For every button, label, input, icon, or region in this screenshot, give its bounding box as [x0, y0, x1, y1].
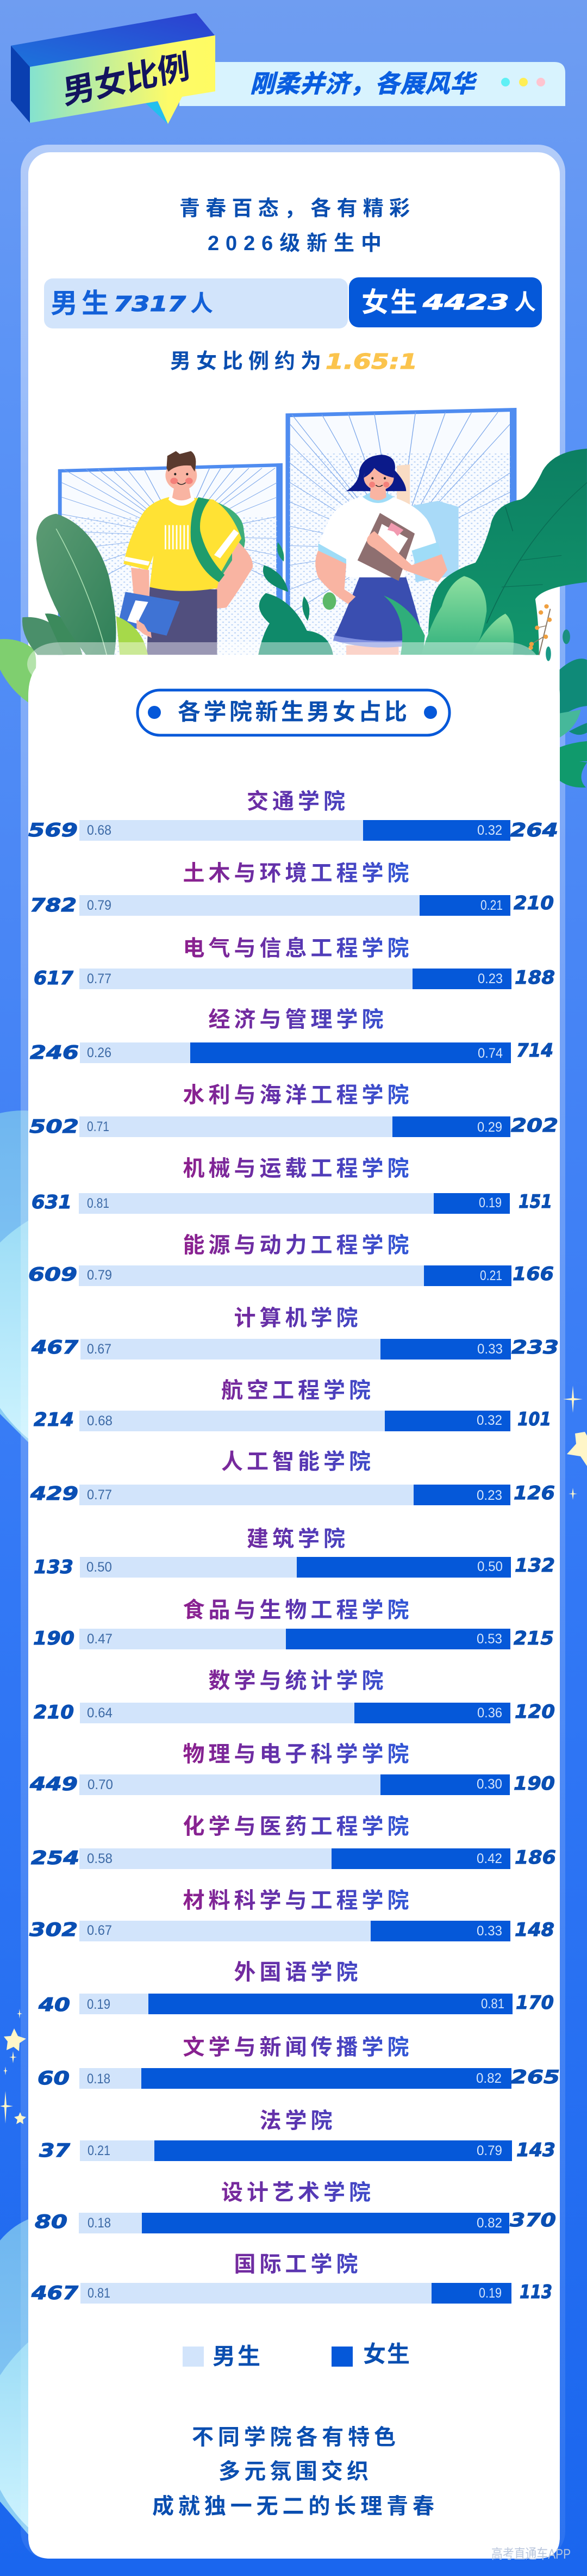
row: 机械与运载工程学院: 机械与运载工程学院 [183, 1157, 413, 1181]
row: 国际工学院: 113 [520, 2281, 552, 2303]
row: 法学院 [39, 2109, 555, 2162]
bar: 文学与新闻传播学院: 0.18 [87, 2071, 110, 2087]
row: 国际工学院 [31, 2252, 552, 2304]
summary block [44, 197, 542, 374]
row: 食品与生物工程学院 [33, 1598, 554, 1649]
row: 交通学院 [28, 790, 558, 841]
bar: 建筑学院 [80, 1557, 511, 1578]
bar: 国际工学院: 0.19 [479, 2286, 502, 2301]
row: 化学与医药工程学院: 254 [31, 1847, 79, 1869]
row: 经济与管理学院: 经济与管理学院 [209, 1008, 387, 1032]
row: 航空工程学院: 101 [517, 1408, 551, 1430]
subtitle bar [179, 62, 565, 106]
chart panel [28, 655, 560, 2559]
row: 航空工程学院: 214 [34, 1409, 74, 1431]
legend [183, 2342, 410, 2369]
row: 建筑学院: 建筑学院 [247, 1527, 349, 1551]
row: 建筑学院 [34, 1527, 555, 1578]
ratio sentence [170, 350, 417, 374]
bar: 航空工程学院 [79, 1411, 510, 1431]
decorative dots [501, 78, 545, 86]
bar: 能源与动力工程学院: 0.79 [87, 1268, 112, 1283]
row: 人工智能学院: 人工智能学院 [221, 1450, 374, 1474]
bar: 能源与动力工程学院 [79, 1265, 511, 1286]
bar: 人工智能学院: 0.77 [87, 1487, 112, 1503]
female total pill: 4423 [422, 290, 509, 314]
bar: 电气与信息工程学院: 0.23 [478, 971, 503, 986]
bar: 外国语学院: 0.81 [481, 1996, 504, 2012]
bar: 电气与信息工程学院: 0.77 [87, 971, 111, 986]
row: 数学与统计学院 [34, 1669, 555, 1723]
row: 电气与信息工程学院: 188 [515, 967, 555, 989]
bar: 机械与运载工程学院: 0.19 [479, 1195, 502, 1211]
male total pill: 男生 [51, 288, 109, 319]
legend: 男生 [213, 2344, 260, 2369]
row: 计算机学院: 467 [31, 1337, 78, 1358]
bar: 物理与电子科学学院: 0.70 [88, 1777, 113, 1792]
row: 人工智能学院 [30, 1450, 555, 1505]
bar: 经济与管理学院: 0.74 [478, 1046, 503, 1061]
bar: 数学与统计学院: 0.64 [87, 1705, 113, 1721]
row: 化学与医药工程学院 [31, 1815, 556, 1869]
bar: 土木与环境工程学院 [79, 895, 510, 916]
bar: 化学与医药工程学院: 0.58 [87, 1851, 113, 1866]
row: 设计艺术学院: 80 [35, 2211, 67, 2233]
row: 外国语学院 [38, 1960, 554, 2016]
bar: 法学院: 0.79 [477, 2143, 502, 2158]
row: 法学院: 37 [39, 2140, 70, 2162]
bar: 国际工学院: 0.81 [88, 2286, 110, 2301]
plants [0, 449, 587, 761]
stars left [0, 2009, 26, 2124]
row: 计算机学院: 计算机学院 [234, 1306, 362, 1330]
row: 建筑学院: 133 [34, 1556, 73, 1578]
bar: 外国语学院: 0.19 [87, 1997, 110, 2012]
bar: 食品与生物工程学院: 0.47 [87, 1631, 113, 1647]
closing text: 成就独一无二的长理青春 [152, 2494, 434, 2518]
row: 物理与电子科学学院: 物理与电子科学学院 [183, 1742, 413, 1766]
bar: 国际工学院 [80, 2283, 511, 2304]
row: 外国语学院: 170 [516, 1992, 554, 2014]
row: 土木与环境工程学院: 土木与环境工程学院 [183, 861, 413, 885]
row: 法学院: 法学院 [260, 2109, 336, 2133]
closing text: 不同学院各有特色 [192, 2425, 396, 2449]
legend: 女生 [363, 2342, 410, 2367]
subtitle: 刚柔并济，各展风华 [250, 70, 477, 98]
ratio sentence: 男女比例约为 [170, 350, 321, 373]
bar: 经济与管理学院 [80, 1042, 511, 1063]
row: 水利与海洋工程学院: 202 [511, 1115, 558, 1137]
bar: 材料科学与工程学院 [79, 1921, 510, 1941]
translucent panel lip [27, 642, 539, 686]
header banner [11, 13, 565, 124]
watermark: 高考直通车APP [491, 2547, 571, 2562]
chart heading pill [138, 690, 449, 735]
row: 文学与新闻传播学院 [38, 2035, 560, 2089]
row: 建筑学院: 132 [515, 1555, 555, 1576]
row: 外国语学院: 外国语学院 [234, 1960, 362, 1984]
row: 国际工学院: 467 [31, 2282, 78, 2304]
intro line 2: 2026级新生中 [208, 232, 382, 255]
row: 经济与管理学院 [30, 1008, 553, 1064]
bar: 文学与新闻传播学院 [79, 2068, 511, 2089]
bar: 能源与动力工程学院: 0.21 [480, 1268, 502, 1283]
chart heading pill: 各学院新生男女占比 [178, 699, 407, 724]
bar: 计算机学院: 0.33 [477, 1342, 503, 1357]
row: 材料科学与工程学院: 材料科学与工程学院 [183, 1889, 413, 1913]
frame behind male student [58, 463, 283, 655]
male total pill [44, 278, 348, 328]
bar: 化学与医药工程学院 [79, 1848, 510, 1869]
row: 材料科学与工程学院: 148 [515, 1919, 554, 1941]
background blob lower left [0, 2218, 33, 2540]
bar: 设计艺术学院: 0.82 [477, 2215, 502, 2231]
female total pill: 女生 [361, 287, 417, 318]
row: 文学与新闻传播学院: 文学与新闻传播学院 [183, 2035, 413, 2059]
row: 食品与生物工程学院: 190 [33, 1628, 74, 1649]
bar: 化学与医药工程学院: 0.42 [477, 1851, 502, 1866]
row: 水利与海洋工程学院: 水利与海洋工程学院 [183, 1083, 413, 1107]
row: 电气与信息工程学院: 617 [34, 967, 73, 989]
row: 经济与管理学院: 246 [30, 1042, 79, 1064]
bar: 土木与环境工程学院: 0.21 [480, 898, 503, 913]
row: 材料科学与工程学院 [29, 1889, 554, 1941]
row: 电气与信息工程学院 [34, 936, 555, 989]
row: 国际工学院: 国际工学院 [234, 2252, 362, 2276]
3D title block [11, 13, 215, 124]
row: 航空工程学院: 航空工程学院 [221, 1379, 374, 1402]
bar: 计算机学院: 0.67 [87, 1342, 111, 1357]
bar: 法学院 [80, 2140, 512, 2161]
row: 物理与电子科学学院: 190 [514, 1773, 555, 1795]
row: 能源与动力工程学院: 609 [28, 1264, 77, 1286]
row: 计算机学院: 233 [511, 1337, 559, 1358]
bar: 物理与电子科学学院: 0.30 [477, 1777, 502, 1792]
female total pill: 人 [514, 290, 536, 314]
bar: 建筑学院: 0.50 [477, 1559, 503, 1574]
row: 设计艺术学院: 370 [510, 2209, 556, 2231]
row: 数学与统计学院: 210 [34, 1702, 74, 1723]
row: 能源与动力工程学院: 166 [513, 1263, 554, 1285]
row: 水利与海洋工程学院: 502 [29, 1116, 79, 1138]
row: 数学与统计学院: 120 [515, 1701, 555, 1723]
row: 设计艺术学院: 设计艺术学院 [221, 2181, 374, 2205]
row: 交通学院: 569 [28, 820, 78, 841]
intro line 1: 青春百态，各有精彩 [179, 197, 410, 220]
row: 机械与运载工程学院: 151 [519, 1191, 552, 1213]
leaf tip below right margin [560, 759, 587, 787]
row: 土木与环境工程学院 [30, 861, 554, 916]
frame behind female student [285, 408, 516, 655]
bar: 机械与运载工程学院: 0.81 [87, 1196, 109, 1211]
bar: 人工智能学院 [79, 1485, 510, 1505]
bar: 材料科学与工程学院: 0.67 [87, 1923, 112, 1938]
male student [118, 451, 253, 655]
closing text [152, 2425, 434, 2518]
row: 电气与信息工程学院: 电气与信息工程学院 [183, 936, 413, 960]
row: 人工智能学院: 429 [30, 1483, 78, 1505]
row: 机械与运载工程学院 [32, 1157, 552, 1214]
bar: 水利与海洋工程学院: 0.71 [87, 1119, 109, 1134]
bar: 数学与统计学院 [80, 1703, 510, 1723]
row: 食品与生物工程学院: 215 [514, 1628, 554, 1649]
bar: 电气与信息工程学院 [79, 969, 511, 989]
row: 土木与环境工程学院: 210 [514, 892, 554, 914]
bar: 文学与新闻传播学院: 0.82 [476, 2071, 502, 2086]
row: 经济与管理学院: 714 [516, 1040, 553, 1062]
stars right [563, 1386, 587, 1500]
bar: 设计艺术学院 [79, 2213, 509, 2233]
bar: 交通学院 [79, 820, 510, 841]
row: 化学与医药工程学院: 186 [515, 1847, 556, 1869]
row: 机械与运载工程学院: 631 [32, 1191, 72, 1213]
row: 外国语学院: 40 [38, 1994, 70, 2016]
bar: 水利与海洋工程学院: 0.29 [477, 1120, 502, 1135]
bar: 材料科学与工程学院: 0.33 [477, 1923, 502, 1939]
row: 计算机学院 [31, 1306, 559, 1360]
bar: 计算机学院 [80, 1339, 511, 1360]
main title: 男女比例 [61, 48, 191, 111]
row: 物理与电子科学学院: 449 [29, 1773, 78, 1795]
row: 文学与新闻传播学院: 60 [38, 2068, 70, 2089]
female student [315, 455, 459, 655]
row: 能源与动力工程学院 [28, 1233, 554, 1286]
bar: 机械与运载工程学院 [79, 1193, 510, 1214]
bar: 法学院: 0.21 [88, 2143, 110, 2158]
row: 设计艺术学院 [35, 2181, 556, 2233]
female total pill [349, 277, 542, 327]
row: 土木与环境工程学院: 782 [30, 895, 77, 916]
bar: 食品与生物工程学院: 0.53 [477, 1631, 502, 1647]
bar: 食品与生物工程学院 [79, 1629, 510, 1649]
row: 能源与动力工程学院: 能源与动力工程学院 [183, 1233, 413, 1257]
illustration: students and plants [0, 408, 587, 761]
closing text: 多元氛围交织 [218, 2460, 369, 2484]
bar: 航空工程学院: 0.68 [87, 1413, 113, 1429]
male total pill: 人 [190, 290, 213, 316]
bar: 经济与管理学院: 0.26 [87, 1045, 111, 1060]
bar: 物理与电子科学学院 [79, 1774, 510, 1795]
bar: 设计艺术学院: 0.18 [88, 2215, 111, 2231]
bar: 交通学院: 0.68 [87, 823, 111, 838]
bar: 数学与统计学院: 0.36 [477, 1705, 502, 1721]
row: 材料科学与工程学院: 302 [29, 1919, 78, 1941]
male total pill: 7317 [114, 292, 186, 316]
row: 航空工程学院 [34, 1379, 551, 1431]
row: 人工智能学院: 126 [514, 1482, 555, 1504]
bar: 水利与海洋工程学院 [79, 1116, 510, 1137]
row: 水利与海洋工程学院 [29, 1083, 558, 1138]
row: 物理与电子科学学院 [29, 1742, 555, 1795]
row: 食品与生物工程学院: 食品与生物工程学院 [183, 1598, 413, 1622]
bar: 交通学院: 0.32 [477, 823, 502, 838]
bar: 土木与环境工程学院: 0.79 [87, 898, 111, 913]
background blob upper left [0, 1110, 33, 1447]
bar: 外国语学院 [79, 1994, 513, 2014]
row: 法学院: 143 [516, 2139, 555, 2161]
bar: 航空工程学院: 0.32 [477, 1413, 502, 1428]
row: 交通学院: 264 [510, 820, 558, 841]
row: 数学与统计学院: 数学与统计学院 [209, 1669, 387, 1693]
row: 文学与新闻传播学院: 265 [511, 2066, 560, 2088]
bar: 人工智能学院: 0.23 [477, 1488, 502, 1503]
ratio sentence: 1.65:1 [326, 350, 417, 374]
row: 交通学院: 交通学院 [247, 790, 349, 814]
row: 化学与医药工程学院: 化学与医药工程学院 [183, 1815, 413, 1839]
bar: 建筑学院: 0.50 [86, 1560, 112, 1575]
